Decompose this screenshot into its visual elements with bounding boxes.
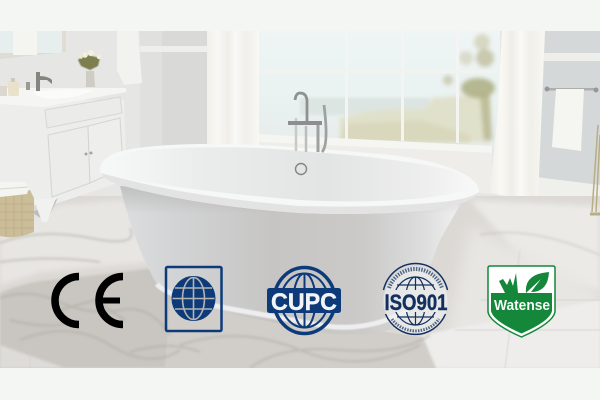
logo: Watense shield [488, 266, 555, 337]
right curtain [490, 31, 545, 200]
floor [0, 196, 600, 368]
vanity cabinet [0, 88, 127, 222]
outer rim [100, 144, 479, 214]
floor tap [288, 93, 326, 152]
basket with towels [0, 182, 34, 237]
bathtub [100, 144, 479, 334]
logo: CE mark [55, 276, 123, 324]
distant landscape [300, 98, 430, 115]
floor shadow [0, 268, 172, 368]
logo: CUPC: CUPC [271, 289, 337, 316]
hanging towel [117, 31, 142, 85]
tub interior [175, 148, 432, 202]
sink and faucet [0, 72, 52, 96]
marble veins [0, 228, 600, 368]
tree [443, 34, 495, 140]
logo: ISO901: ISO901 [384, 290, 448, 315]
window [259, 31, 500, 153]
left curtain [207, 31, 259, 149]
logo: ISO901 [384, 264, 448, 335]
tub body [120, 186, 460, 334]
logo: Watense shield: Watense [494, 298, 550, 314]
gold stand [590, 125, 600, 214]
overflow drain [296, 164, 306, 174]
logo: globe certification badge [166, 267, 222, 331]
bright reflection wedge [422, 300, 600, 368]
towel bar and towel [544, 86, 598, 151]
leaf icon [499, 272, 549, 293]
logo: CUPC [267, 268, 341, 334]
back wall [0, 31, 600, 211]
wall mirror [0, 31, 66, 59]
flower vase [78, 50, 101, 87]
tub foot rim [157, 284, 408, 327]
